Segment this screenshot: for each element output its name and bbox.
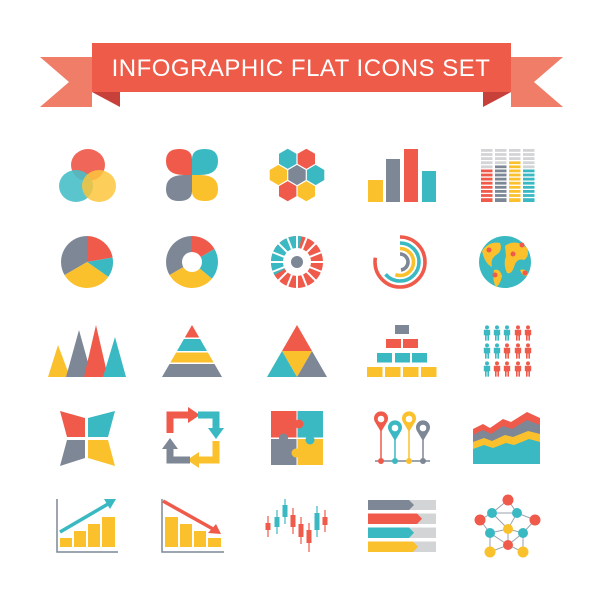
icon: donut chart bbox=[166, 236, 218, 288]
icon: stacked area chart bbox=[473, 412, 540, 464]
icon: rising bar chart bbox=[57, 499, 118, 552]
icon: split triangle bbox=[267, 325, 327, 377]
icon: equalizer bbox=[480, 149, 536, 202]
icon: pie chart bbox=[61, 236, 113, 288]
icon: globe bbox=[479, 236, 531, 288]
icon: horizontal progress bars bbox=[368, 500, 436, 552]
icon: people grid bbox=[484, 325, 531, 377]
icon: network diagram bbox=[474, 494, 540, 558]
icon: bar chart bbox=[368, 149, 436, 202]
title banner bbox=[40, 43, 563, 107]
icon: location pins timeline bbox=[374, 411, 430, 464]
icon: falling bar chart bbox=[162, 499, 224, 552]
icon: segmented ring bbox=[270, 235, 324, 289]
icon: cycle arrows bbox=[162, 407, 224, 468]
icon: mountain peaks bbox=[48, 325, 126, 377]
icon: puzzle bbox=[271, 411, 323, 465]
icon: block pyramid bbox=[367, 325, 436, 377]
icon: hexagons bbox=[270, 149, 324, 201]
icon: four-point star bbox=[60, 411, 115, 466]
icon: flower petals bbox=[166, 149, 218, 201]
icon: radial arcs bbox=[375, 237, 425, 287]
icon: candlestick chart bbox=[266, 499, 328, 552]
icon: layered pyramid bbox=[162, 325, 222, 377]
title text: INFOGRAPHIC FLAT ICONS SET bbox=[112, 55, 490, 82]
icon: venn diagram bbox=[59, 149, 116, 202]
